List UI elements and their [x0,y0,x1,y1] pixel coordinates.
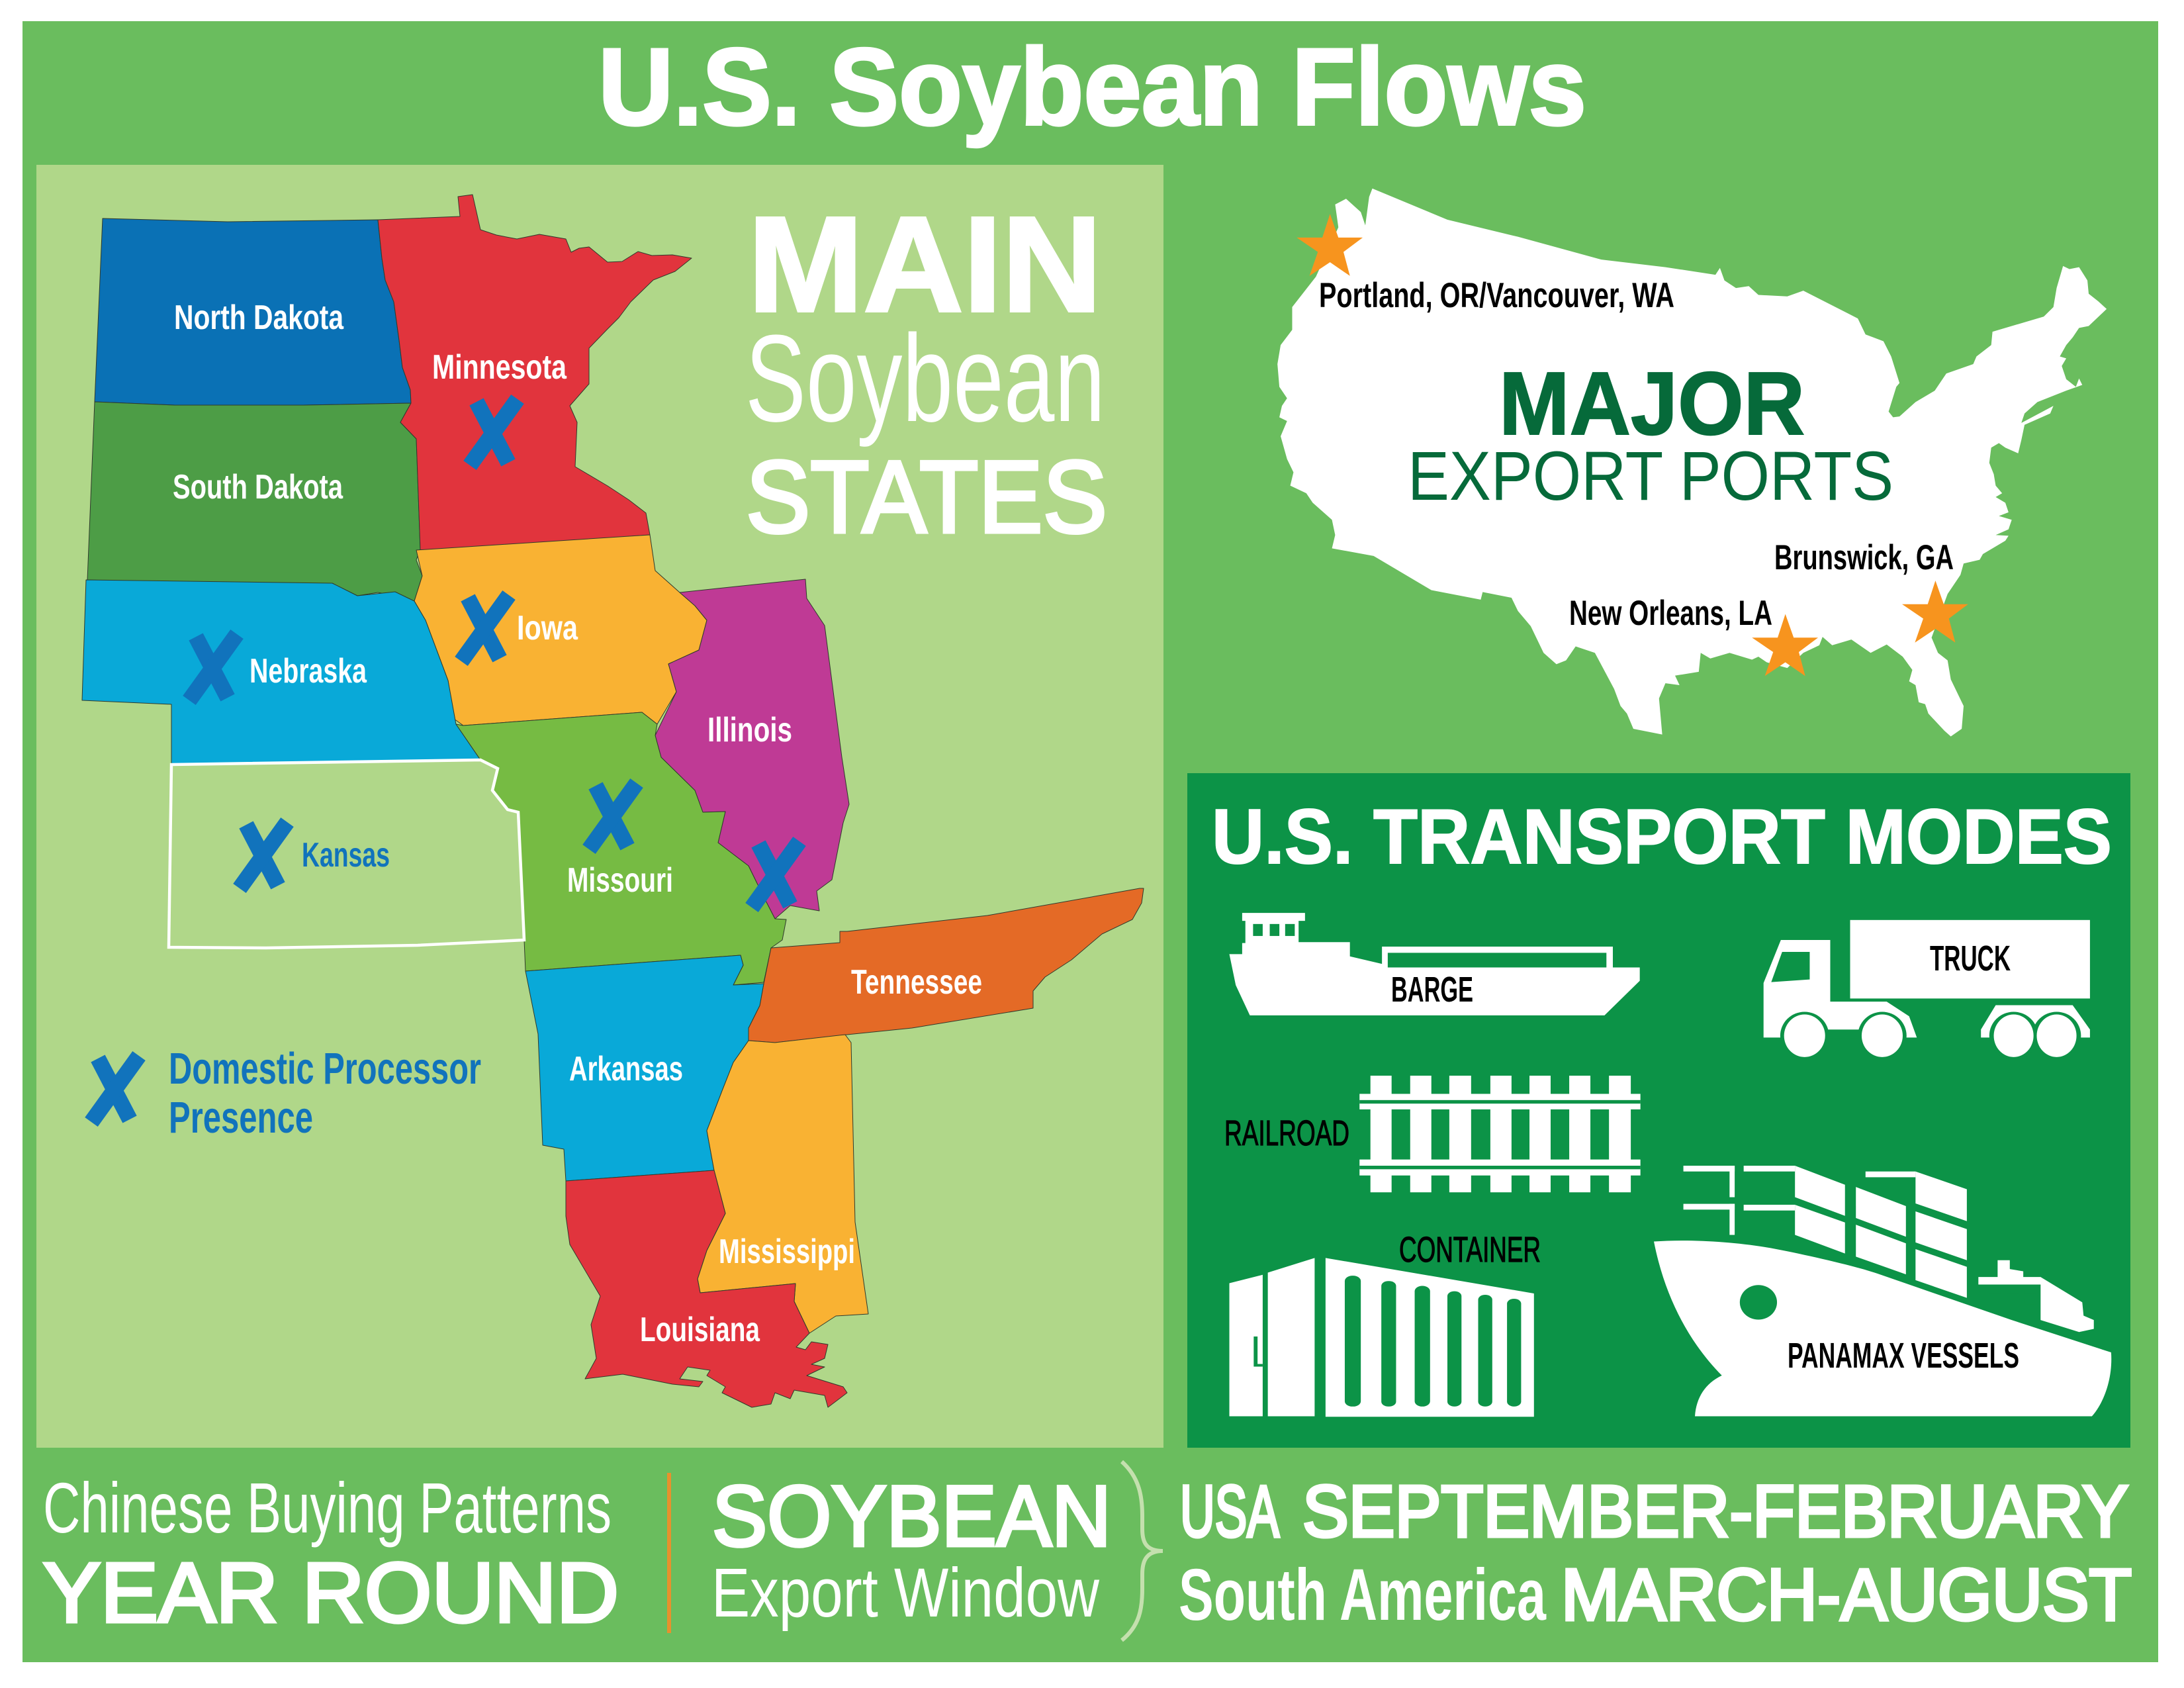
bottom: export window dates: South America [1179,1554,1547,1636]
icon: panamax vessel [1654,1166,2111,1417]
state: South Dakota [87,402,422,601]
heading: main soybean states [745,189,1107,554]
legend: domestic processor presence: Presence [169,1093,313,1143]
marker: Iowa processor [461,595,509,661]
marker: Illinois processor [752,841,799,908]
marker: Kansas processor [240,822,287,888]
bottom: Chinese buying patterns: YEAR ROUND [43,1546,619,1640]
label: North Dakota: North Dakota [174,299,344,337]
state: Mississippi [698,1035,868,1333]
legend: domestic processor presence [91,1044,481,1143]
state: Missouri [456,712,786,985]
divider line [667,1473,671,1633]
state: Tennessee [749,888,1144,1043]
state: North Dakota [95,218,411,405]
state: Nebraska [82,580,480,765]
heading: export ports: EXPORT PORTS [1408,438,1893,515]
label: Arkansas: Arkansas [569,1050,683,1088]
star: New Orleans [1752,614,1818,676]
label: Illinois: Illinois [707,711,792,749]
label: container: CONTAINER [1399,1230,1541,1270]
bottom: Chinese buying patterns [43,1468,619,1640]
label: Kansas: Kansas [302,836,390,874]
legend: domestic processor presence: Domestic Processor [169,1044,481,1094]
state: Iowa [414,535,707,726]
star: Brunswick [1902,581,1968,643]
state: Arkansas [525,955,764,1181]
heading: main soybean states: STATES [746,440,1107,554]
label: Portland: Portland, OR/Vancouver, WA [1319,276,1674,315]
label: Brunswick: Brunswick, GA [1774,538,1954,577]
panel: major export ports [1277,189,2107,736]
panel: transport modes [1187,773,2130,1448]
bottom: soybean export window: Export Window [711,1554,1100,1632]
state map [82,195,1144,1407]
label: South Dakota: South Dakota [173,468,343,506]
US map silhouette [1277,189,2107,736]
brace [1122,1462,1163,1640]
star: Portland [1297,214,1363,276]
bottom: soybean export window: SOYBEAN [712,1468,1111,1564]
icon: railroad [1359,1076,1641,1192]
state: Kansas [169,760,524,948]
heading: major: MAJOR [1499,353,1805,453]
label: Iowa: Iowa [517,609,578,647]
label: railroad: RAILROAD [1224,1113,1349,1153]
heading: U.S. transport modes: U.S. TRANSPORT MODES [1212,793,2112,880]
icon: barge [1230,913,1640,1015]
bottom: export window dates: SEPTEMBER-FEBRUARY [1302,1471,2128,1552]
label: barge: BARGE [1391,970,1473,1009]
label: New Orleans: New Orleans, LA [1569,594,1772,633]
label: Louisiana: Louisiana [640,1311,760,1349]
bottom: export window dates: USA [1180,1471,1279,1552]
label: panamax vessels: PANAMAX VESSELS [1788,1336,2019,1376]
heading: main soybean states: MAIN [748,189,1102,340]
bottom: export window dates: MARCH-AUGUST [1561,1554,2132,1636]
label: Tennessee: Tennessee [851,963,982,1002]
title: U.S. Soybean Flows [598,26,1586,148]
label: Missouri: Missouri [567,861,673,900]
marker: Nebraska processor [189,634,237,700]
heading: main soybean states: Soybean [745,309,1105,447]
bottom: export window dates [1179,1471,2132,1636]
state: Louisiana [566,1170,847,1407]
icon: container [1230,1258,1534,1417]
label: Mississippi: Mississippi [719,1233,855,1271]
state: Minnesota [378,195,692,550]
bottom: Chinese buying patterns: Chinese Buying Patterns [43,1468,612,1548]
marker: Missouri processor [589,783,637,849]
icon: truck [1764,920,2090,1060]
label: Minnesota: Minnesota [432,348,567,387]
panel: main soybean states [36,165,1163,1448]
label: truck: TRUCK [1930,939,2011,978]
label: Nebraska: Nebraska [250,652,367,690]
bottom: soybean export window [711,1468,1111,1632]
marker: Minnesota processor [470,399,518,465]
state: Illinois [655,579,849,919]
